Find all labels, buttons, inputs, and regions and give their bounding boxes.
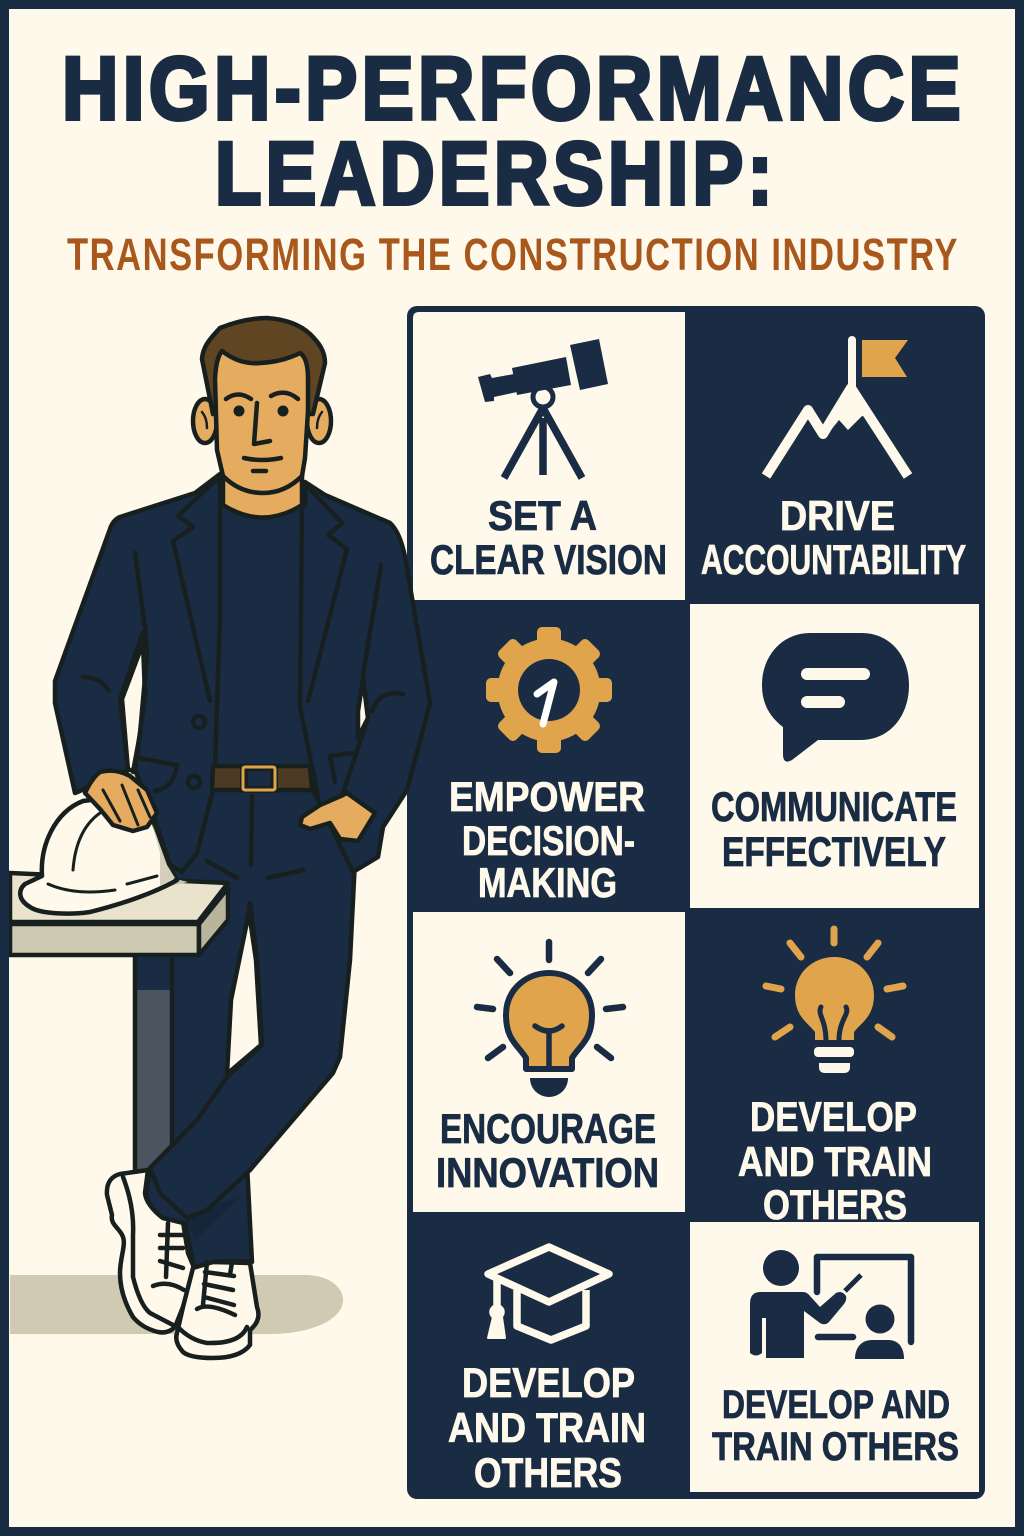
hard hat (20, 800, 177, 914)
panel: develop and train others, bulb (738, 929, 932, 1228)
right hand in pocket (300, 793, 375, 841)
panel: drive accountability (701, 340, 966, 583)
label: OTHERS (763, 1181, 907, 1228)
left hand on hat (85, 771, 157, 831)
label: AND TRAIN (738, 1138, 932, 1185)
table top (10, 873, 228, 955)
label: EMPOWER (449, 773, 645, 820)
label: SET A (488, 492, 597, 539)
neck (223, 465, 302, 518)
facial features (226, 393, 298, 471)
jacket (55, 474, 430, 872)
panel: develop and train others, graduation cap (448, 1247, 646, 1496)
icon: light bulb outlined (477, 942, 623, 1097)
icon: mountain with flag (766, 340, 908, 476)
label: INNOVATION (436, 1149, 659, 1196)
icon: light bulb solid (766, 929, 903, 1073)
label: OTHERS (474, 1449, 622, 1496)
label: DEVELOP (462, 1359, 635, 1406)
standing leg (172, 860, 252, 1268)
label (430, 492, 667, 583)
icon: telescope (478, 339, 608, 478)
label (712, 1383, 959, 1469)
right shoe (176, 1262, 258, 1358)
icon: speech bubble (762, 633, 909, 762)
leg shadow (187, 1195, 243, 1240)
panel: empower decision-making (449, 627, 645, 906)
hair (202, 318, 325, 414)
label: ENCOURAGE (440, 1105, 656, 1152)
label (449, 773, 645, 906)
gap between legs (227, 912, 261, 1074)
label: DRIVE (780, 492, 895, 539)
label: AND TRAIN (448, 1404, 646, 1451)
title (62, 38, 965, 223)
panel: develop and train others, presenter (690, 1222, 979, 1492)
label (448, 1359, 646, 1496)
sleeve gaps (122, 643, 145, 770)
label: COMMUNICATE (711, 783, 957, 830)
belt (212, 764, 312, 793)
label: CLEAR VISION (430, 536, 667, 583)
table leg (135, 955, 172, 1180)
panel: encourage innovation (413, 912, 685, 1212)
label: DEVELOP AND (722, 1383, 950, 1427)
icon: graduation cap (488, 1247, 609, 1340)
title: LEADERSHIP: (215, 123, 777, 223)
label: MAKING (478, 859, 617, 906)
label (436, 1105, 659, 1196)
person (10, 318, 430, 1358)
label (711, 783, 957, 875)
jacket details (83, 476, 403, 878)
ears (193, 399, 331, 443)
label (738, 1093, 932, 1228)
face (215, 351, 308, 493)
trouser cuff behind knee (146, 1170, 200, 1224)
floor shadow (10, 1275, 343, 1334)
panel: set a clear vision (413, 312, 685, 600)
label: DEVELOP (750, 1093, 917, 1140)
label: DECISION- (462, 817, 635, 864)
icon: teacher at board (750, 1250, 911, 1359)
panel: leadership grid (407, 306, 985, 1499)
label (701, 492, 966, 583)
label: EFFECTIVELY (722, 828, 946, 875)
icon: gear with number one (486, 627, 612, 753)
label: TRAIN OTHERS (712, 1425, 959, 1469)
crossed leg (150, 790, 355, 1218)
left shoe (107, 1170, 195, 1332)
panel: communicate effectively (690, 604, 979, 908)
